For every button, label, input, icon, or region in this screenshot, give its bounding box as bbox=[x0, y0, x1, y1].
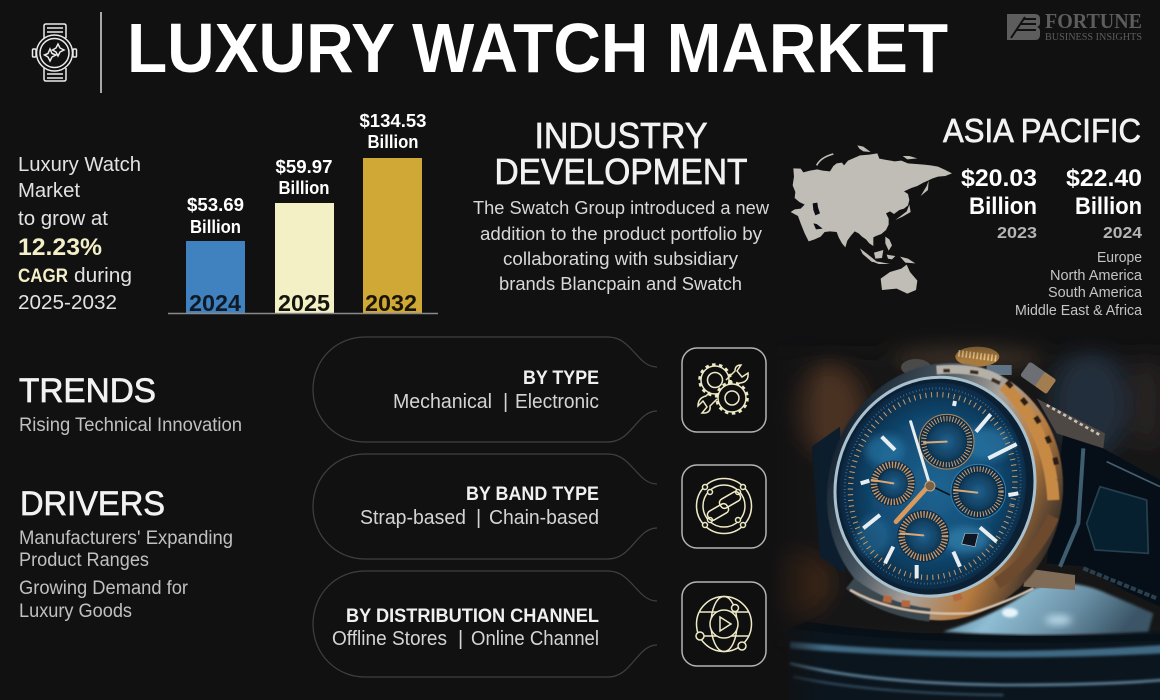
photo edge fades bbox=[770, 336, 1014, 682]
sub-dial hands bbox=[872, 442, 977, 535]
bar chart: market size bbox=[168, 111, 438, 316]
panel: by distribution channel: | bbox=[458, 628, 463, 650]
bar 2025 bbox=[275, 157, 334, 316]
title: LUXURY WATCH MARKET bbox=[127, 9, 948, 87]
panel: trends bbox=[19, 372, 242, 436]
icon: chain link in ring bbox=[682, 465, 766, 548]
photo: luxury chronograph watch on pedestal bbox=[780, 338, 1160, 700]
stat: 2024: Billion bbox=[1075, 193, 1142, 220]
heading: Asia Pacific: ASIA PACIFIC bbox=[943, 112, 1141, 149]
panel: by band type: | bbox=[476, 507, 481, 529]
list: other regions: South America bbox=[1048, 285, 1143, 301]
panel: by band type bbox=[313, 454, 657, 559]
bar 2024: $53.69 bbox=[187, 195, 244, 215]
panel: trends: TRENDS bbox=[19, 372, 156, 410]
date window bbox=[962, 533, 978, 547]
panel: by type: Mechanical bbox=[393, 391, 492, 413]
panel: by distribution channel: Online Channel bbox=[471, 628, 599, 650]
text: CAGR statement: CAGR bbox=[18, 266, 68, 287]
text: industry development body: The Swatch Group introduced a new bbox=[473, 197, 770, 218]
bar 2024: 2024 bbox=[189, 290, 241, 316]
text: CAGR statement: to grow at bbox=[18, 207, 108, 230]
crystal ring bbox=[834, 376, 1036, 598]
text: CAGR statement bbox=[18, 153, 141, 314]
dial bbox=[840, 382, 1026, 590]
bar 2025: 2025 bbox=[278, 290, 330, 316]
panel: by distribution channel bbox=[313, 571, 657, 677]
panel: trends: Rising Technical Innovation bbox=[19, 415, 242, 436]
bar 2032: $134.53 bbox=[360, 111, 426, 131]
panel: drivers bbox=[19, 485, 233, 622]
stat: 2024 bbox=[1066, 165, 1142, 242]
logo: Fortune Business Insights: BUSINESS INSIGHTS bbox=[1045, 32, 1142, 43]
strap bbox=[812, 427, 1160, 607]
logo: Fortune Business Insights bbox=[1007, 9, 1142, 43]
icon: globe with play button bbox=[682, 582, 766, 666]
panel: by type bbox=[313, 337, 657, 442]
sub-dials bbox=[919, 414, 974, 469]
text: industry development body: addition to the product portfolio by bbox=[480, 223, 763, 244]
blurred warm background bbox=[780, 338, 1160, 623]
panel: by distribution channel: Offline Stores bbox=[332, 628, 447, 650]
panel: by band type: Chain-based bbox=[489, 507, 599, 529]
list: other regions: Middle East & Africa bbox=[1015, 303, 1143, 319]
watch case bbox=[827, 362, 1064, 622]
heading: industry development: DEVELOPMENT bbox=[494, 151, 748, 192]
bar 2032: 2032 bbox=[365, 290, 417, 316]
panel: drivers: Luxury Goods bbox=[19, 601, 132, 622]
stat: 2024: 2024 bbox=[1103, 225, 1142, 242]
panel: drivers: Product Ranges bbox=[19, 550, 149, 571]
header divider bbox=[100, 12, 102, 93]
text: industry development body: collaborating with subsidiary bbox=[503, 248, 739, 269]
stat: 2024: $22.40 bbox=[1066, 165, 1142, 192]
list: other regions: Europe bbox=[1097, 250, 1142, 266]
panel: by distribution channel: BY DISTRIBUTION CHANNEL bbox=[346, 605, 599, 627]
heading: industry development: INDUSTRY bbox=[534, 115, 708, 156]
stat: 2023: $20.03 bbox=[961, 165, 1037, 192]
lugs and pushers bbox=[901, 347, 1105, 590]
map: Asia Pacific bbox=[791, 145, 952, 294]
list: other regions: North America bbox=[1050, 268, 1143, 284]
text: CAGR statement: Luxury Watch bbox=[18, 153, 141, 176]
bar 2024: Billion bbox=[190, 217, 241, 237]
panel: by type: BY TYPE bbox=[523, 367, 599, 389]
bar 2025: Billion bbox=[278, 178, 330, 198]
panel: drivers: Manufacturers' Expanding bbox=[19, 528, 233, 549]
stat: 2023: 2023 bbox=[997, 225, 1037, 242]
bar 2024 bbox=[186, 195, 245, 316]
panel: drivers: Growing Demand for bbox=[19, 578, 189, 599]
panel: by type: | bbox=[503, 391, 508, 413]
hour indices bbox=[861, 401, 1018, 578]
panel: drivers: DRIVERS bbox=[20, 485, 165, 523]
panel: by type: Electronic bbox=[515, 391, 599, 413]
bar 2032 bbox=[360, 111, 426, 316]
bar 2032: Billion bbox=[368, 132, 418, 152]
bar 2025: $59.97 bbox=[276, 157, 332, 177]
text: industry development body: brands Blancpain and Swatch bbox=[499, 273, 742, 294]
text: CAGR statement: Market bbox=[18, 179, 80, 202]
text: CAGR statement: 12.23% bbox=[18, 234, 102, 261]
stat: 2023: Billion bbox=[969, 193, 1037, 220]
pedestal bbox=[787, 584, 1160, 700]
logo: Fortune Business Insights: FORTUNE bbox=[1045, 9, 1142, 33]
panel: by band type: Strap-based bbox=[360, 507, 466, 529]
text: industry development body bbox=[473, 197, 770, 294]
heading: industry development bbox=[494, 115, 748, 192]
bezel gold highlights bbox=[1003, 385, 1053, 500]
panel: by band type: BY BAND TYPE bbox=[466, 483, 599, 505]
stat: 2023 bbox=[961, 165, 1037, 242]
icon: gears and wrench bbox=[682, 348, 766, 432]
text: CAGR statement: during bbox=[74, 264, 132, 287]
skeleton texture bbox=[962, 427, 1012, 460]
list: other regions bbox=[1015, 250, 1143, 319]
minute track bbox=[848, 392, 1018, 580]
main hands bbox=[911, 422, 929, 483]
text: CAGR statement: 2025-2032 bbox=[18, 291, 117, 314]
icon: watch bbox=[32, 24, 76, 81]
